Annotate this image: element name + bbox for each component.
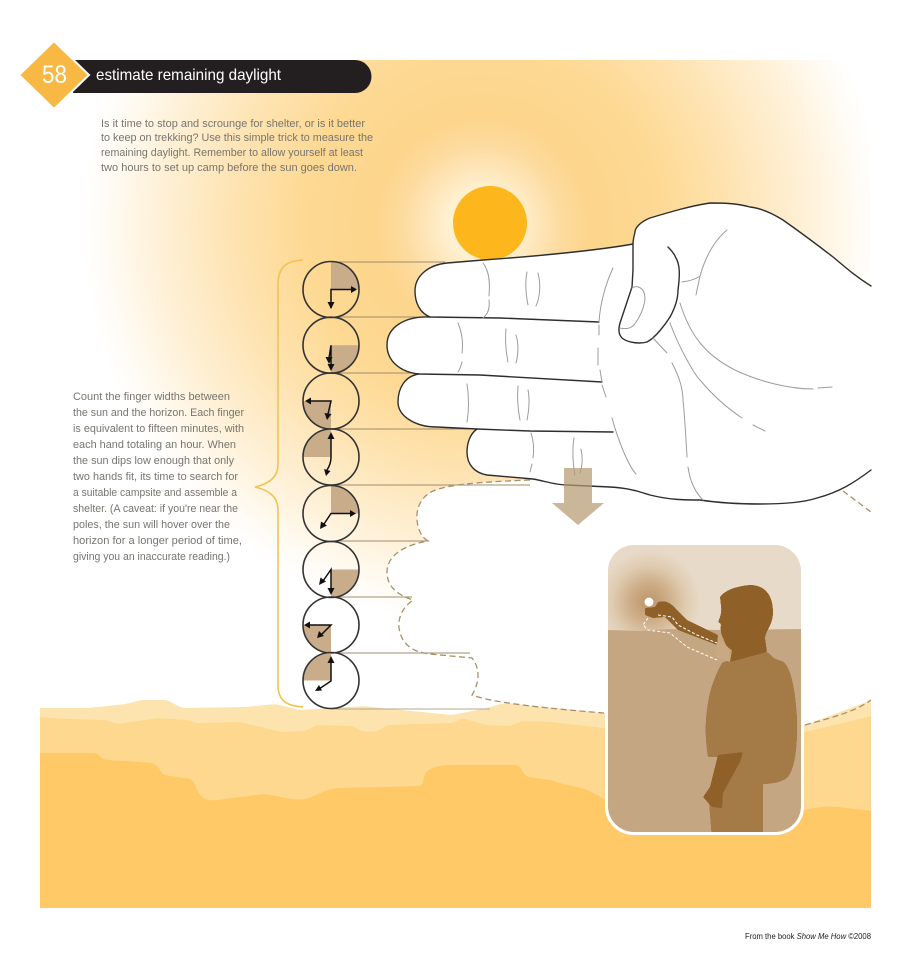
clocks column — [303, 262, 359, 708]
side explanation text: poles, the sun will hover over the — [73, 519, 230, 531]
side explanation text: is equivalent to fifteen minutes, with — [73, 423, 244, 435]
side explanation text: horizon for a longer period of time, — [73, 535, 242, 547]
side explanation text: two hands fit, its time to search for — [73, 471, 238, 483]
sun — [453, 186, 527, 260]
black bar — [73, 60, 372, 93]
heading banner — [19, 41, 372, 109]
hand fill — [387, 203, 871, 504]
card sky — [608, 545, 801, 631]
raised hand — [387, 203, 871, 504]
side explanation text: Count the finger widths between — [73, 391, 230, 403]
card ground — [608, 629, 801, 832]
dashed white arm outline — [643, 615, 717, 660]
ground: deep layer — [40, 753, 871, 908]
clock 5 — [303, 486, 359, 542]
intro paragraph: remaining daylight. Remember to allow yourself at least — [101, 147, 363, 159]
clock 3 — [303, 373, 359, 429]
ground: light layer — [40, 700, 871, 732]
dashed outline: lowered hand position — [387, 480, 871, 725]
side explanation text — [73, 391, 244, 563]
person: backpack and torso — [706, 652, 797, 840]
side explanation text: a suitable campsite and assemble a — [73, 487, 238, 499]
side explanation text: each hand totaling an hour. When — [73, 439, 236, 451]
source credit: From the book Show Me How ©2008 — [745, 931, 871, 941]
card white frame — [606, 544, 802, 834]
clock 8 — [303, 652, 359, 708]
side explanation text: the sun dips low enough that only — [73, 455, 234, 467]
hand outline — [387, 203, 871, 504]
intro paragraph — [101, 118, 373, 174]
clock 1 — [303, 262, 359, 318]
lower hand white silhouette — [387, 470, 871, 725]
sky gradient background — [40, 60, 871, 720]
clock 7 — [303, 597, 359, 653]
clock 4 — [303, 429, 359, 485]
side explanation text: the sun and the horizon. Each finger — [73, 407, 244, 419]
side explanation text: shelter. (A caveat: if you're near the — [73, 503, 238, 515]
small sun — [644, 598, 654, 606]
intro paragraph: Is it time to stop and scrounge for shelter, or is it better — [101, 118, 365, 130]
number: 58 — [42, 61, 67, 89]
clock 2 — [303, 317, 359, 373]
hand creases — [458, 230, 832, 500]
number diamond — [19, 41, 89, 109]
person: neck patch — [728, 660, 730, 662]
intro paragraph: two hours to set up camp before the sun goes down. — [101, 162, 357, 174]
side explanation text: giving you an inaccurate reading.) — [73, 551, 230, 563]
ground layers — [40, 700, 871, 908]
ground: middle layer — [40, 716, 871, 811]
inset card: person measuring daylight — [597, 544, 802, 840]
person: head — [718, 585, 773, 662]
heading text: estimate remaining daylight — [96, 67, 282, 84]
clock 6 — [303, 542, 359, 598]
person: raised arm — [645, 601, 718, 645]
down arrow — [552, 468, 604, 525]
yellow brace — [255, 260, 303, 707]
sun glow — [608, 556, 696, 631]
guide lines from clocks to fingers — [331, 262, 530, 709]
person: lower arm — [703, 752, 743, 808]
intro paragraph: to keep on trekking? Use this simple trick to measure the — [101, 132, 373, 144]
